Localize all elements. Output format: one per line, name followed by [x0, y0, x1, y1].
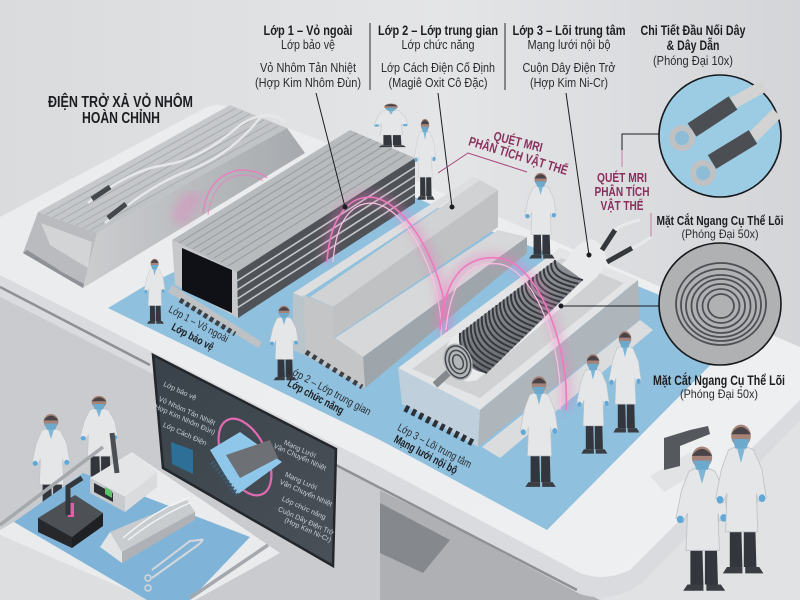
header: layer 1: Vỏ Nhôm Tản Nhiệt: [260, 60, 356, 75]
blue work mat: [108, 195, 745, 530]
monitor labels: Mạng Lưới: [283, 439, 317, 460]
label: core cross-section lower: (Phóng Đại 50x): [680, 387, 758, 401]
magnetic scan ring 2: [327, 197, 447, 337]
monitor labels: Vận Chuyển Nhiệt: [272, 442, 327, 472]
header: layer 2: Lớp Cách Điện Cố Định: [381, 60, 495, 75]
title: [48, 92, 193, 127]
room floor and table base: [0, 280, 800, 600]
label: core cross-section lower: [653, 373, 785, 401]
callout: MRI scan right: [594, 150, 651, 237]
callout: MRI scan left: [438, 128, 570, 178]
small resistor sample: [100, 497, 195, 563]
header: layer 2: [378, 22, 498, 90]
title: ĐIỆN TRỞ XẢ VỎ NHÔM: [48, 92, 193, 111]
monitor labels: Vỏ Nhôm Tản Nhiệt: [157, 395, 217, 427]
layer 3 base tray: [398, 248, 653, 458]
header: layer 1: Lớp 1 – Vỏ ngoài: [264, 22, 352, 38]
monitor labels: Cuộn Dây Điện Trở: [277, 505, 335, 537]
lead wires: [602, 230, 632, 262]
label: core cross-section upper: (Phóng Đại 50x): [682, 227, 758, 241]
layer 1 aluminium housing: [168, 130, 415, 348]
header: layer 2: Lớp 2 – Lớp trung gian: [378, 22, 498, 38]
sample cable: [145, 540, 203, 591]
header: layer 1: Lớp bảo vệ: [281, 37, 335, 52]
finished resistor: [23, 105, 305, 288]
callout: MRI scan left: PHÂN TÍCH VẬT THỂ: [467, 133, 570, 178]
header: connector detail: [640, 22, 746, 68]
test instrument: grey box: [90, 433, 157, 512]
magnetic scan ring 3: [440, 258, 566, 410]
monitor labels: (Hợp Kim Ni-Cr): [283, 517, 332, 544]
layer 2 insulation block: [293, 177, 527, 388]
header: layer 1: [255, 22, 361, 90]
header: connector detail: Chi Tiết Đầu Nối Dây: [640, 22, 746, 38]
technicians on main table: [144, 103, 641, 487]
header: layer 3: Cuộn Dây Điện Trở: [522, 60, 616, 75]
callout: core cross-section magnifier: [659, 243, 781, 365]
bench technicians: [32, 396, 118, 512]
mat label: layer 1: Lớp bảo vệ: [169, 321, 216, 353]
header: layer 3: [512, 22, 626, 90]
header: layer 3: Lớp 3 – Lõi trung tâm: [512, 22, 626, 38]
side bench: [0, 447, 280, 600]
mat label: layer 1: Lớp 1 – Vỏ ngoài: [166, 304, 230, 345]
callout: MRI scan right: PHÂN TÍCH: [594, 184, 650, 199]
mat label: layer 3: Lớp 3 – Lõi trung tâm: [395, 422, 473, 471]
callout: MRI scan left: QUÉT MRI: [492, 128, 544, 155]
monitor labels: Vận Chuyển Nhiệt: [278, 478, 333, 508]
technicians with microscope: [650, 425, 766, 591]
header: layer 3: Mạng lưới nội bộ: [528, 37, 610, 52]
leader lines: [316, 93, 659, 308]
callout: connector magnifier: [659, 75, 781, 197]
monitor labels: Lớp Cách Điện: [162, 422, 208, 447]
header dividers: [370, 23, 505, 90]
header: layer 2: Lớp chức năng: [402, 37, 474, 52]
monitor labels: Mạng Lưới: [284, 471, 318, 492]
monitor 3D model: [208, 411, 282, 503]
monitor: [151, 355, 336, 566]
monitor labels: (Hợp Kim Nhôm Đùn): [151, 403, 216, 437]
monitor labels: Lớp chức năng: [281, 496, 327, 522]
label: core cross-section upper: [656, 213, 784, 241]
monitor labels: Lớp bảo vệ: [162, 381, 197, 402]
mat label: layer 3: Mạng lưới nội bộ: [392, 434, 459, 477]
resistor cable: [88, 115, 285, 223]
mat label: layer 2: Lớp 2 – Lớp trung gian: [286, 364, 373, 418]
header: connector detail: & Dây Dẫn: [666, 37, 720, 53]
callout: MRI scan right: VẬT THỂ: [600, 198, 644, 213]
mat label: layer 2: Lớp chức năng: [285, 377, 346, 417]
magnetic scan ring 1: [178, 170, 267, 222]
header: layer 1: (Hợp Kim Nhôm Đùn): [255, 75, 361, 90]
test instrument: black box: [38, 478, 103, 548]
header: connector detail: (Phóng Đại 10x): [653, 53, 733, 68]
header: layer 2: (Magiê Oxit Cô Đặc): [388, 75, 488, 90]
layer 3 core cylinder and resistor coil: [435, 220, 652, 385]
callout: MRI scan right: QUÉT MRI: [597, 170, 647, 185]
monitor labels: [151, 381, 335, 544]
title: HOÀN CHỈNH: [82, 108, 160, 127]
header: layer 3: (Hợp Kim Ni-Cr): [530, 75, 608, 90]
